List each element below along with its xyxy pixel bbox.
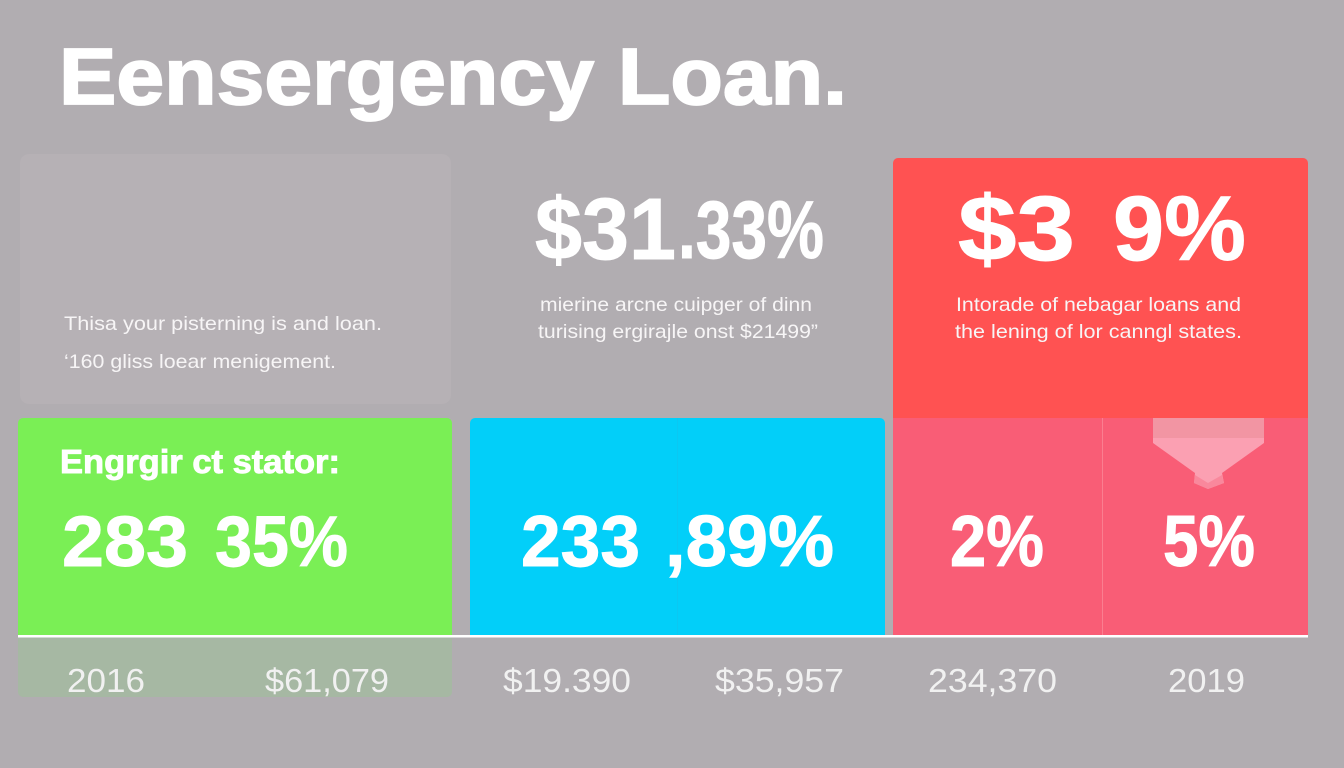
centre stat value: .33% bbox=[678, 185, 824, 276]
centre description: turising ergirajle onst $21499” bbox=[538, 321, 818, 343]
panel: green stat bbox=[18, 418, 452, 635]
bottom labels: $61,079 bbox=[265, 662, 389, 699]
bottom labels: $19.390 bbox=[503, 662, 631, 699]
centre stat value bbox=[535, 181, 824, 278]
panel: blue stat bbox=[470, 418, 885, 635]
panel: centre headline stat bbox=[535, 181, 824, 343]
red stat value: 9% bbox=[1113, 178, 1246, 280]
pink value: 2%: 2% bbox=[950, 502, 1044, 582]
green stat value bbox=[62, 503, 348, 582]
icon: funnel arrow bbox=[1153, 418, 1264, 489]
green stat value: 283 bbox=[62, 503, 188, 582]
blue stat value bbox=[521, 502, 834, 582]
bottom labels: 234,370 bbox=[928, 662, 1057, 699]
bottom labels: $35,957 bbox=[715, 662, 844, 699]
blue stat value: ,89% bbox=[665, 502, 834, 582]
blue stat value: 233 bbox=[521, 502, 640, 582]
intro text block: ‘160 gliss loear menigement. bbox=[64, 351, 336, 373]
title: Eensergency Loan. bbox=[59, 32, 847, 121]
centre description: mierine arcne cuipger of dinn bbox=[540, 294, 812, 316]
panel: intro text bbox=[20, 154, 451, 404]
centre stat value: $31 bbox=[535, 181, 676, 278]
panel: red headline stat bbox=[893, 158, 1308, 418]
bottom labels: 2019 bbox=[1168, 662, 1245, 699]
bottom labels: 2016 bbox=[67, 662, 145, 699]
intro text block: Thisa your pisterning is and loan. bbox=[64, 313, 382, 335]
intro text block bbox=[64, 313, 382, 373]
green reflection bbox=[18, 637, 452, 697]
panel: pink stats bbox=[893, 418, 1308, 635]
pink value: 5%: 5% bbox=[1163, 502, 1255, 582]
red stat value: $3 bbox=[958, 178, 1075, 280]
red description: the lening of lor canngl states. bbox=[955, 321, 1242, 343]
red stat value bbox=[958, 178, 1246, 280]
green stat value: 35% bbox=[215, 503, 348, 582]
green heading: Engrgir ct stator: bbox=[60, 443, 340, 480]
baseline rule bbox=[18, 635, 1308, 638]
red description bbox=[955, 294, 1242, 343]
bottom labels bbox=[67, 662, 1245, 699]
centre description bbox=[538, 294, 818, 343]
red description: Intorade of nebagar loans and bbox=[956, 294, 1241, 316]
